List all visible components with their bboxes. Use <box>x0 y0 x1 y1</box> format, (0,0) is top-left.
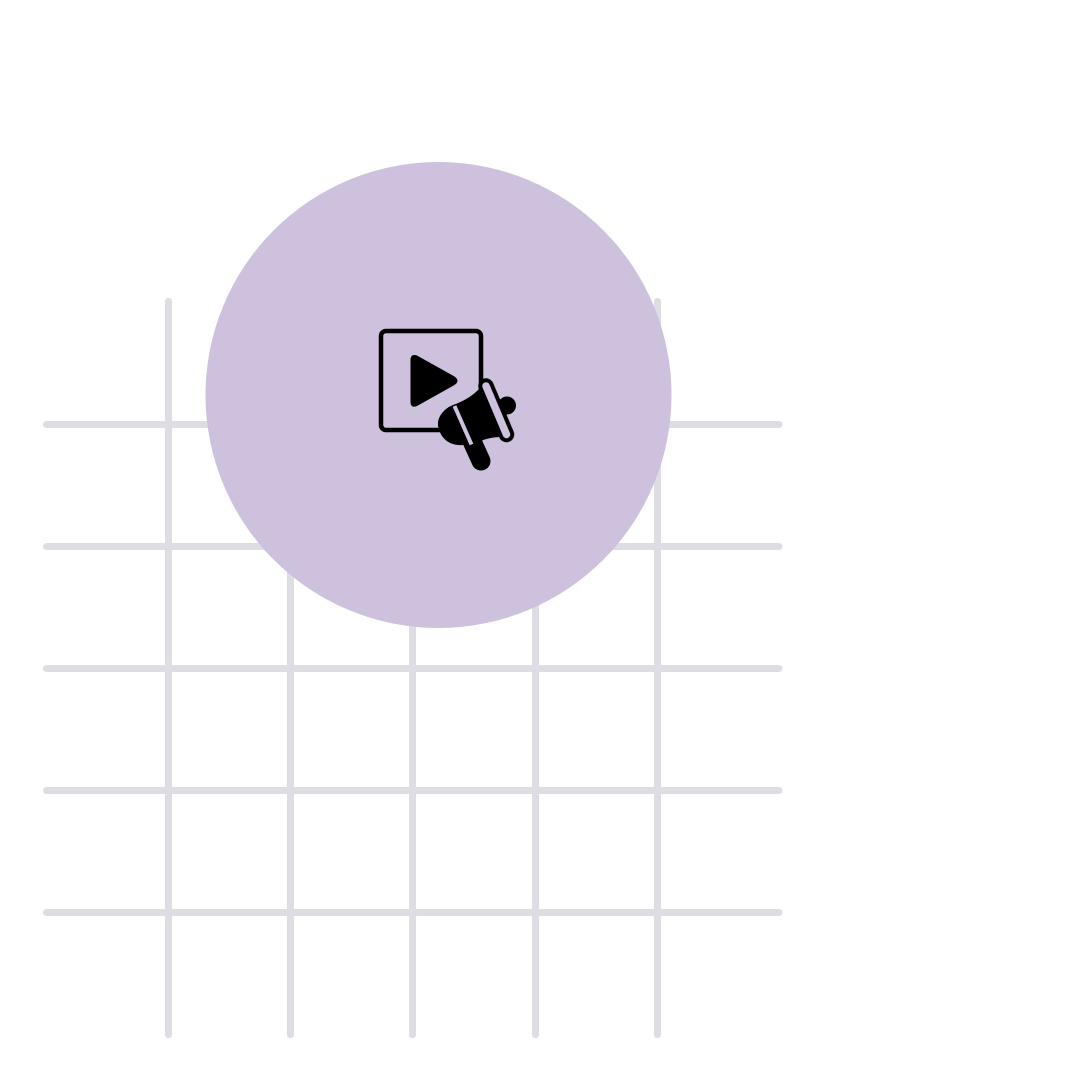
icon: play triangle <box>410 355 458 407</box>
icon: megaphone <box>438 386 516 461</box>
grid of lines <box>43 298 782 1038</box>
megaphone sound cap <box>498 396 516 414</box>
megaphone bell rim <box>486 386 506 434</box>
lilac circle <box>206 162 672 628</box>
megaphone handle <box>471 439 481 461</box>
icon: video player with megaphone <box>381 331 516 461</box>
megaphone body <box>438 388 501 445</box>
icon: video frame <box>381 331 481 430</box>
megaphone divider <box>454 406 472 444</box>
